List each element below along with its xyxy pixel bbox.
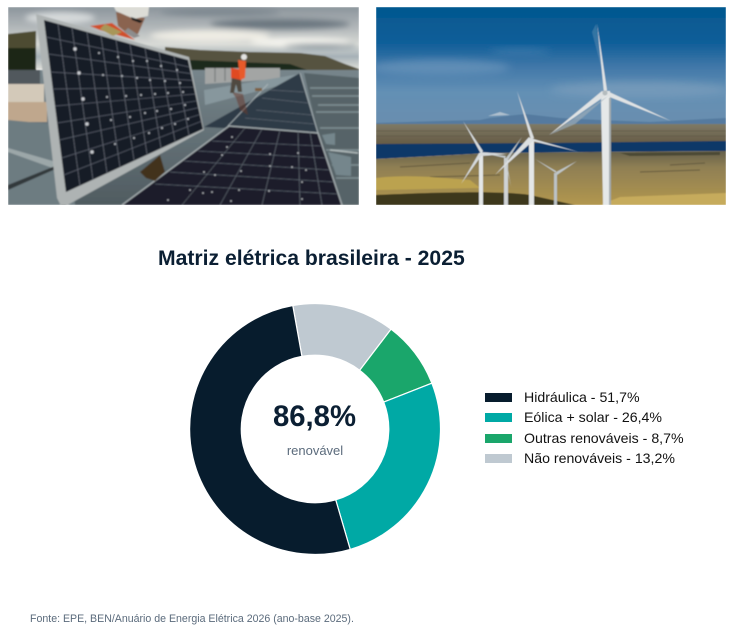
worker holding the panel bbox=[90, 7, 165, 181]
segment: outras renováveis bbox=[360, 329, 432, 402]
legend item: hidráulica: Hidráulica - 51,7% bbox=[524, 389, 640, 405]
worker in the background bbox=[230, 54, 262, 93]
tilted solar panel bbox=[36, 14, 204, 208]
legend bbox=[485, 389, 684, 466]
segment: hidráulica bbox=[190, 305, 350, 554]
segment: eólica + solar bbox=[336, 383, 441, 549]
center value: 86,8% bbox=[273, 400, 356, 433]
turbine: middle bbox=[495, 91, 579, 205]
turbine: large front bbox=[549, 23, 671, 205]
legend item: eólica + solar: Eólica + solar - 26,4% bbox=[524, 409, 662, 425]
turbine: left bbox=[461, 121, 508, 205]
title: Matriz elétrica brasileira - 2025 bbox=[158, 247, 465, 270]
legend item: não renováveis: Não renováveis - 13,2% bbox=[524, 450, 675, 466]
photo: workers installing solar panels bbox=[8, 7, 359, 205]
center label: renovável bbox=[287, 443, 343, 458]
source note: Fonte: EPE, BEN/Anuário de Energia Elétrica 2026 (ano-base 2025). bbox=[30, 613, 354, 625]
legend item: outras renováveis: Outras renováveis - 8,7% bbox=[524, 430, 684, 446]
turbine: rear middle bbox=[483, 137, 522, 205]
photo: wind turbines over a landscape bbox=[376, 7, 726, 205]
donut chart bbox=[190, 304, 440, 554]
segment: não renováveis bbox=[293, 303, 391, 370]
turbine: rear small bbox=[535, 159, 577, 205]
lower roof solar array bbox=[122, 73, 342, 205]
